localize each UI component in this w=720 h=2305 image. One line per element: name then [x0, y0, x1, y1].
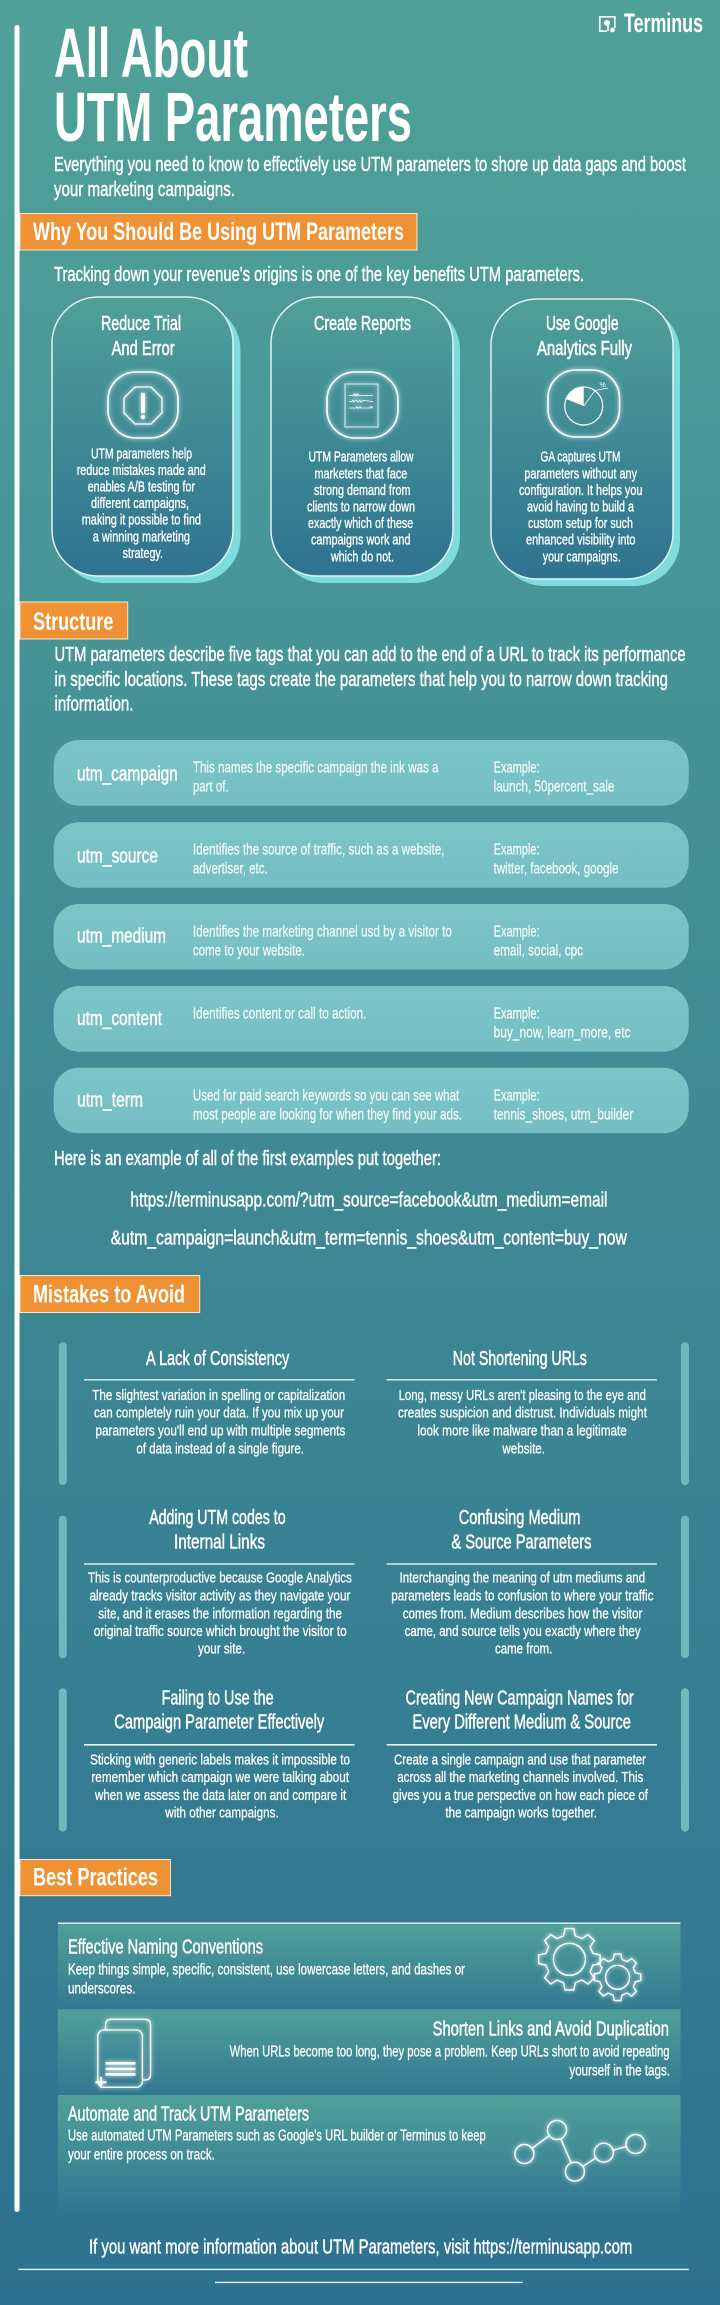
mistake: Confusing Medium & Source Parameters: Confusing Medium: [459, 1506, 580, 1529]
row: utm_medium: come to your website.: [193, 943, 305, 960]
row: utm_term: most people are looking for when they find your ads.: [193, 1106, 462, 1123]
card body: different campaigns,: [91, 496, 189, 512]
mistake: Confusing Medium & Source Parameters: [387, 1506, 657, 1658]
section heading: Best Practices: Best Practices: [33, 1864, 158, 1892]
example text: Here is an example of all of the first examples put together:: [54, 1148, 441, 1170]
card body: parameters without any: [524, 466, 638, 482]
mistake: Confusing Medium & Source Parameters: Interchanging the meaning of utm mediums and: [400, 1570, 645, 1587]
mistake: Failing to Use the Campaign Parameter Effectively: Failing to Use the: [162, 1686, 274, 1709]
card body: avoid having to build a: [527, 499, 635, 515]
mistake: Failing to Use the Campaign Parameter Effectively: Sticking with generic labels makes it impossible to: [90, 1751, 350, 1768]
mistake: Adding UTM codes to Internal Links: site, and it erases the information regarding the: [98, 1605, 342, 1622]
icon: pie chart: [548, 370, 620, 437]
card body: clients to narrow down: [307, 499, 415, 515]
title: UTM Parameters: [54, 78, 412, 156]
mistake: Adding UTM codes to Internal Links: Internal Links: [174, 1530, 265, 1553]
card body: marketers that face: [314, 466, 407, 482]
mistake: Creating New Campaign Names: the campaign works together.: [445, 1805, 597, 1822]
row: utm_source: [54, 822, 689, 888]
icon: Terminus key mark: [600, 17, 615, 32]
card heading: [537, 313, 632, 360]
mistake: Confusing Medium & Source Parameters: came, and source tells you exactly where they: [405, 1623, 641, 1640]
row: utm_medium: utm_medium: [77, 925, 166, 947]
row: utm_term: [54, 1068, 689, 1133]
card body: GA captures UTM: [540, 450, 620, 466]
mistake: Confusing Medium & Source Parameters: parameters leads to confusion to where your traffic: [391, 1587, 654, 1604]
row: utm_medium: email, social, cpc: [494, 943, 583, 960]
row: utm_campaign: utm_campaign: [77, 764, 178, 786]
mistake: Confusing Medium & Source Parameters: came from.: [495, 1641, 552, 1658]
best practice: Shorten Links and Avoid Duplication: yourself in the tags.: [569, 2063, 670, 2080]
row: utm_source: Identifies the source of traffic, such as a website,: [193, 842, 444, 859]
card body: which do not.: [330, 549, 394, 565]
card body: enhanced visibility into: [526, 533, 636, 549]
mistake: Not Shortening URLs: Not Shortening URLs: [453, 1347, 587, 1370]
mistake: Adding UTM codes to Internal Links: This is counterproductive because Google Analytics: [88, 1570, 352, 1587]
example URL: [111, 1190, 627, 1249]
icon: gears: [539, 1929, 641, 2001]
card body: UTM Parameters allow: [309, 450, 414, 466]
card body: your campaigns.: [543, 549, 621, 565]
best practice: Effective Naming Conventions: underscores.: [68, 1980, 136, 1997]
card body: configuration. It helps you: [519, 483, 642, 499]
row: utm_medium: Identifies the marketing channel usd by a visitor to: [193, 924, 452, 941]
mistake: Creating New Campaign Names: Creating New Campaign Names for: [406, 1686, 634, 1709]
mistake: Adding UTM codes to Internal Links: original traffic source which brought the visitor to: [94, 1623, 347, 1640]
row: utm_content: buy_now, learn_more, etc: [494, 1025, 631, 1042]
panel: Use Google Analytics Fully: [491, 299, 680, 586]
card heading: Use Google: [546, 313, 618, 335]
card body: exactly which of these: [308, 516, 413, 532]
card body: strong demand from: [314, 483, 410, 499]
mistake: A Lack of Consistency: A Lack of Consistency: [146, 1347, 290, 1370]
mistake: A Lack of Consistency: of data instead of a single figure.: [136, 1440, 304, 1457]
row: utm_campaign: part of.: [193, 779, 229, 796]
row: utm_source: twitter, facebook, google: [494, 860, 618, 877]
row: utm_content: Identifies content or call to action.: [193, 1006, 366, 1023]
row: utm_medium: Example:: [494, 924, 540, 941]
card body: UTM parameters help: [91, 446, 192, 462]
card body: strategy.: [123, 546, 163, 562]
row: utm_term: utm_term: [77, 1090, 143, 1112]
logo: Terminus: [600, 8, 703, 38]
best practice: Effective Naming Conventions: [58, 1922, 680, 2009]
card body: enables A/B testing for: [88, 480, 195, 496]
icon: report document: [327, 372, 398, 438]
best practice: Effective Naming Conventions: Effective Naming Conventions: [68, 1936, 263, 1958]
mistake: A Lack of Consistency: The slightest variation in spelling or capitalization: [92, 1387, 345, 1404]
mistake: Confusing Medium & Source Parameters: & Source Parameters: [451, 1530, 592, 1553]
section heading: Mistakes to Avoid: [20, 1276, 200, 1312]
mistake: Not Shortening URLs: Long, messy URLs aren't pleasing to the eye and: [399, 1387, 646, 1404]
mistake: Creating New Campaign Names: Every Different Medium & Source: [412, 1710, 631, 1733]
best practice: Effective Naming Conventions: Keep things simple, specific, consistent, use lowercase letters, and dashes or: [68, 1961, 465, 1978]
card body: campaigns work and: [311, 533, 410, 549]
card heading: Analytics Fully: [537, 338, 632, 360]
section heading: Why You Should Be Using UTM Parameters: Why You Should Be Using UTM Parameters: [33, 218, 404, 246]
icon: warning octagon: [108, 372, 178, 438]
section heading: Best Practices: [20, 1860, 170, 1896]
best practice: Automate and Track UTM Parameters: Automate and Track UTM Parameters: [68, 2104, 309, 2126]
row: utm_source: advertiser, etc.: [193, 860, 268, 877]
card heading: Create Reports: [314, 313, 411, 335]
mistake: Not Shortening URLs: [387, 1347, 657, 1457]
row: utm_content: utm_content: [77, 1008, 162, 1030]
best practice: Shorten Links and Avoid Duplication: [58, 2009, 680, 2095]
mistake: Failing to Use the Campaign Parameter Effectively: Campaign Parameter Effectively: [114, 1710, 325, 1733]
mistake: Not Shortening URLs: website.: [502, 1440, 545, 1457]
vertical timeline bar: [14, 25, 20, 2212]
mistake: Adding UTM codes to Internal Links: Adding UTM codes to: [149, 1506, 286, 1529]
row: utm_source: utm_source: [77, 846, 158, 868]
row: utm_medium: [54, 904, 689, 970]
subtitle: [54, 154, 686, 201]
mistake: A Lack of Consistency: parameters you'll end up with multiple segments: [96, 1423, 345, 1440]
mistake: Creating New Campaign Names: Create a single campaign and use that parameter: [394, 1751, 646, 1768]
panel: Create Reports: [271, 297, 460, 583]
panel: Reduce Trial And Error: [52, 297, 240, 583]
mistake: A Lack of Consistency: [84, 1347, 354, 1457]
card body: reduce mistakes made and: [77, 463, 206, 479]
best practice: Automate and Track UTM Parameters: your entire process on track.: [68, 2147, 215, 2164]
mistake: Not Shortening URLs: look more like malware than a legitimate: [417, 1423, 627, 1440]
mistake: Not Shortening URLs: creates suspicion and distrust. Individuals might: [398, 1405, 648, 1422]
row: utm_source: Example:: [494, 842, 540, 859]
mistake: Failing to Use the Campaign Parameter Effectively: remember which campaign we were talking about: [91, 1769, 350, 1786]
section heading: Structure: Structure: [33, 608, 113, 636]
section heading: Mistakes to Avoid: Mistakes to Avoid: [33, 1281, 185, 1309]
mistake: Creating New Campaign Names: across all the marketing channels involved. This: [397, 1769, 643, 1786]
structure intro text: information.: [54, 694, 134, 716]
card heading: [101, 313, 181, 360]
mistake: Creating New Campaign Names: [387, 1686, 657, 1822]
mistake: Confusing Medium & Source Parameters: comes from. Medium describes how the visitor: [403, 1605, 642, 1622]
best practice: Automate and Track UTM Parameters: Use automated UTM Parameters such as Google's URL builder or Terminus to keep: [68, 2128, 486, 2145]
mistake: Adding UTM codes to Internal Links: [84, 1506, 354, 1658]
card heading: Reduce Trial: [101, 313, 181, 335]
mistake: Failing to Use the Campaign Parameter Effectively: [84, 1686, 354, 1822]
card body: custom setup for such: [528, 516, 633, 532]
card body: [307, 450, 415, 565]
row: utm_content: Example:: [494, 1006, 540, 1023]
row: utm_term: tennis_shoes, utm_builder: [494, 1106, 633, 1123]
icon: connected nodes: [515, 2120, 645, 2181]
row: utm_campaign: Example:: [494, 760, 540, 777]
icon: documents: [96, 2019, 151, 2088]
row: utm_content: [54, 986, 689, 1052]
row: utm_campaign: This names the specific campaign the ink was a: [193, 760, 439, 777]
section heading: Structure: [20, 602, 128, 639]
best practice: Automate and Track UTM Parameters: [58, 2095, 680, 2217]
mistake: Creating New Campaign Names: gives you a true perspective on how each piece of: [393, 1787, 649, 1804]
mistake: Failing to Use the Campaign Parameter Effectively: when we assess the data later on and compare it: [94, 1787, 347, 1804]
subtitle: your marketing campaigns.: [54, 179, 235, 201]
row: utm_campaign: launch, 50percent_sale: [494, 779, 614, 796]
title: All About: [54, 14, 248, 92]
card body: [77, 446, 206, 562]
side bars: mistakes: [59, 1342, 689, 1832]
mistake: Failing to Use the Campaign Parameter Effectively: with other campaigns.: [165, 1805, 279, 1822]
mistake: Adding UTM codes to Internal Links: your site.: [198, 1641, 245, 1658]
row: utm_campaign: [54, 740, 689, 806]
card body: making it possible to find: [82, 513, 201, 529]
mistake: Adding UTM codes to Internal Links: already tracks visitor activity as they navigate your: [90, 1587, 350, 1604]
mistake: A Lack of Consistency: can completely ruin your data. If you mix up your: [94, 1405, 344, 1422]
card body: [519, 450, 642, 565]
structure intro text: [54, 644, 686, 716]
section heading: Why You Should Be Using UTM Parameters: [20, 214, 417, 250]
title: [54, 14, 412, 156]
card heading: And Error: [112, 338, 175, 360]
row: utm_term: Example:: [494, 1088, 540, 1105]
icon: pie chart: %: [600, 382, 606, 389]
row: utm_term: Used for paid search keywords so you can see what: [193, 1088, 460, 1105]
card body: a winning marketing: [93, 529, 190, 545]
